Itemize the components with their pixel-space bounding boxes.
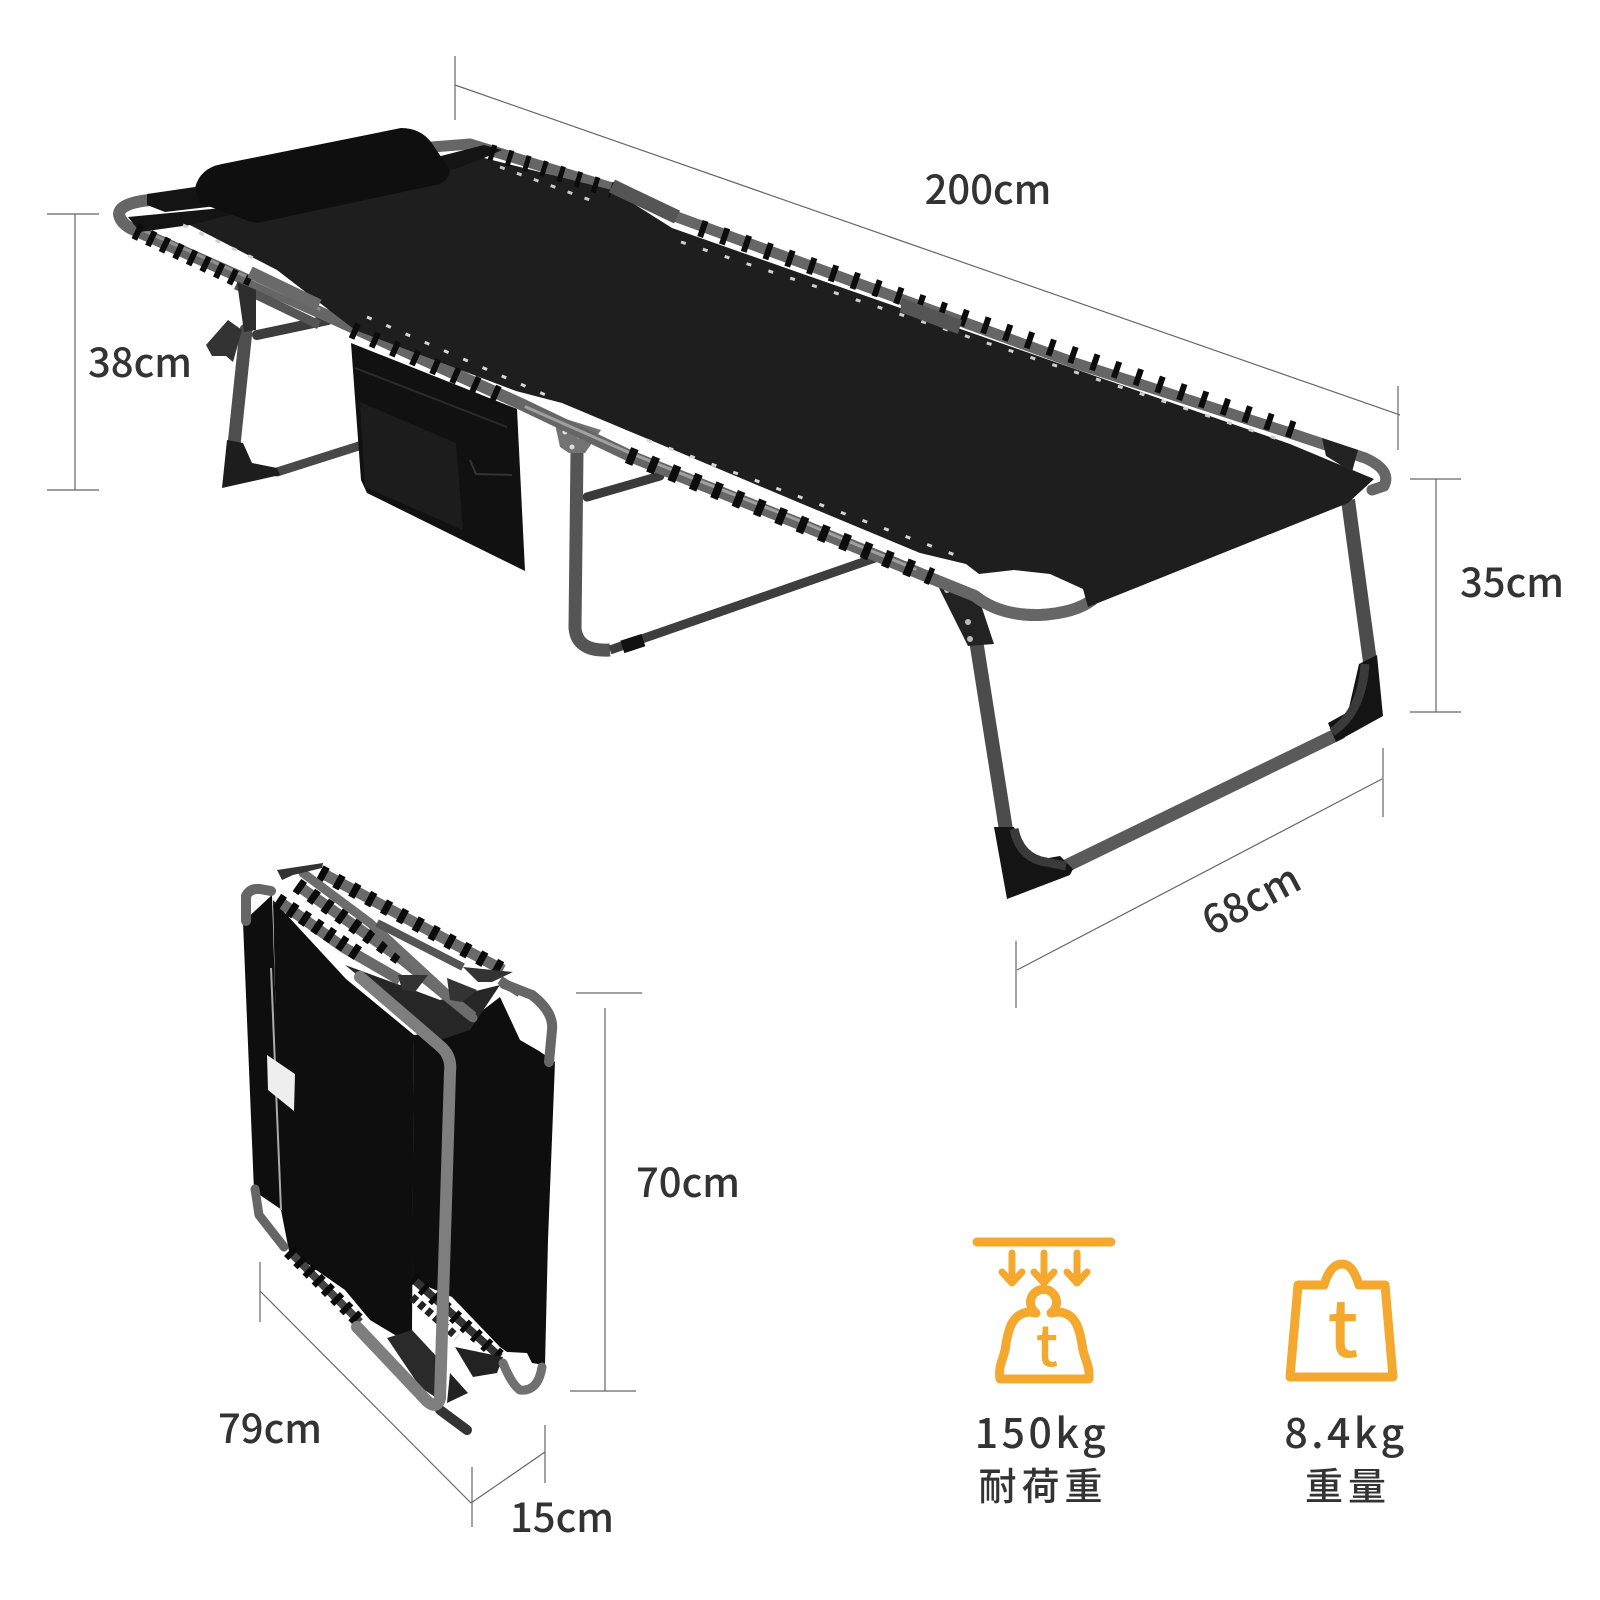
folded cot illustration [243, 863, 555, 1430]
label: load capacity: 耐荷重 [978, 1456, 1108, 1511]
dimension: 15cm: 15cm [510, 1486, 614, 1544]
far leg frame [206, 320, 660, 497]
icon: product weight bag [1290, 1264, 1393, 1380]
white label [267, 1055, 295, 1111]
bed frame tubes [119, 144, 1386, 615]
label: weight [1284, 1400, 1408, 1511]
label: load capacity [975, 1400, 1109, 1511]
dimension: 79cm: 79cm [218, 1397, 322, 1455]
lacing: far edge head section [490, 152, 612, 190]
hinge rods [303, 873, 473, 1018]
dimension: 35cm [1410, 479, 1564, 712]
silver strap line [271, 968, 281, 1210]
folded bottom tray and plates [387, 1330, 503, 1430]
lacing: near edge head section [135, 231, 254, 287]
dimension: 200cm: 200cm [925, 158, 1051, 216]
lacing bundles [277, 872, 520, 1357]
dimension: 35cm: 35cm [1460, 551, 1564, 609]
label: load capacity: 150kg [975, 1400, 1109, 1460]
open cot illustration [119, 128, 1386, 899]
foot leg frame [939, 500, 1383, 899]
frame hinges [236, 186, 1358, 472]
lacing along bed edges [135, 152, 1302, 577]
top far bundle [320, 872, 503, 970]
icon: load capacity weight: t [1036, 1302, 1058, 1383]
side pocket organizer [351, 343, 525, 571]
dimension: 70cm [570, 993, 740, 1391]
dimension: 68cm [1016, 748, 1383, 1008]
top near bundle [277, 900, 400, 980]
dimension: 79cm [218, 1262, 471, 1503]
head straps [128, 145, 502, 232]
dimension: 68cm: 68cm [1191, 847, 1310, 947]
label: weight: 8.4kg [1284, 1400, 1408, 1460]
dimension: 200cm [455, 56, 1400, 450]
lower right lacing [412, 1278, 500, 1357]
hardware shadow between bundles [345, 965, 500, 1040]
lacing: near edge pocket section [352, 330, 504, 397]
dimension: 38cm: 38cm [88, 331, 192, 389]
lower left lacing [289, 1251, 360, 1322]
fabric bed surface [186, 158, 1374, 607]
folded fabric panels [243, 895, 555, 1365]
hinge plates [277, 863, 513, 1002]
icon: load capacity weight [977, 1242, 1111, 1383]
dimension: 38cm [47, 214, 192, 490]
top middle bundle [297, 885, 473, 1017]
label: weight: 重量 [1305, 1456, 1391, 1511]
icon: product weight bag: t [1328, 1268, 1358, 1380]
lacing: near edge long section [628, 455, 932, 577]
pillow [195, 128, 450, 223]
dimension: 70cm: 70cm [636, 1151, 740, 1209]
dimension: 15cm [471, 1425, 614, 1544]
middle leg [553, 415, 875, 653]
folded frame tubes [246, 889, 552, 1405]
